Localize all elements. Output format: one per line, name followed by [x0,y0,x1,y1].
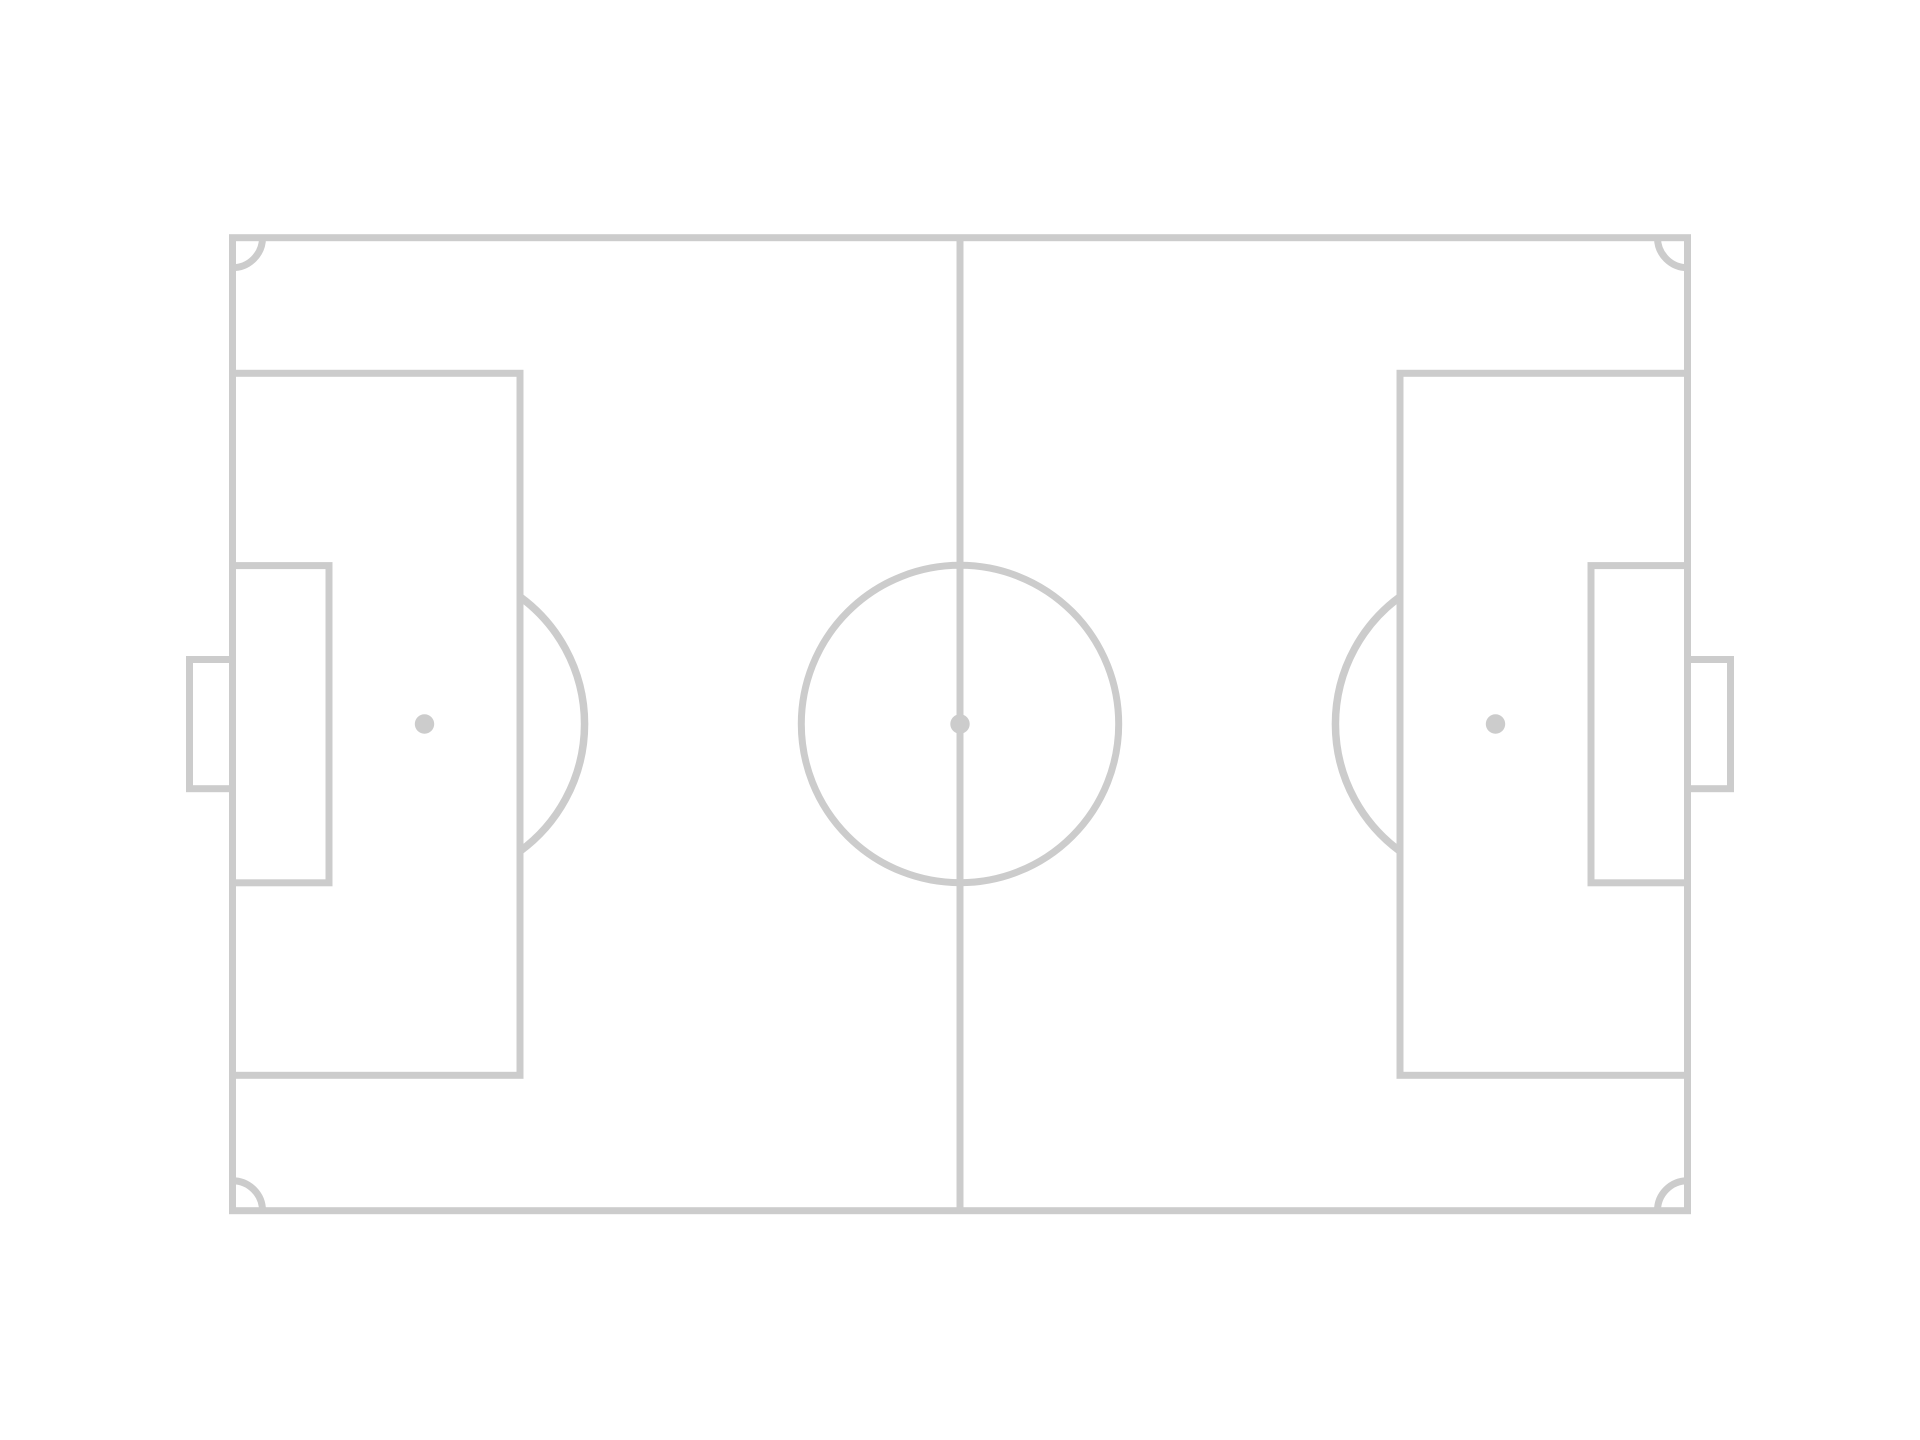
left penalty area [232,373,520,1075]
corner arc: bottom right [1658,1181,1688,1211]
centre spot [950,714,970,734]
pitch spots [415,714,1505,734]
right penalty area [1400,373,1688,1075]
right goal [1688,660,1730,789]
halfway line [956,238,964,1211]
right penalty arc [1335,597,1400,851]
left penalty spot [415,714,434,734]
left goal area [232,566,329,883]
corner arc: top left [232,238,262,268]
pitch outline [232,238,1688,1211]
corner arc: top right [1658,238,1688,268]
left goal [190,660,232,789]
right penalty spot [1486,714,1505,734]
pitch lines [190,238,1730,1211]
left penalty arc [520,597,585,851]
centre circle [801,565,1119,883]
corner arc: bottom left [232,1181,262,1211]
right goal area [1591,566,1688,883]
